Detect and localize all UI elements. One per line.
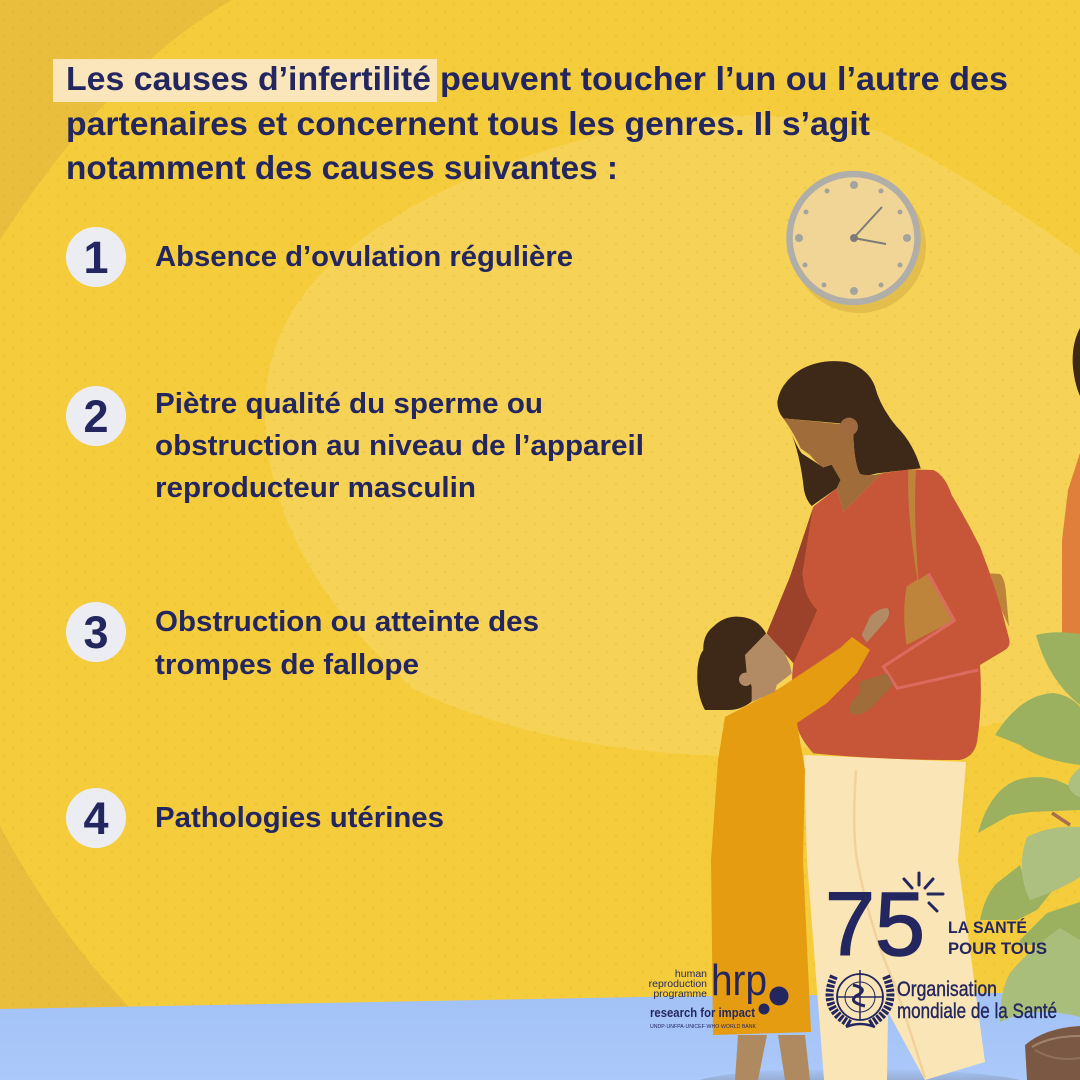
woman face and neck	[783, 418, 882, 512]
slogan: LA SANTÉ	[948, 918, 1027, 937]
child dress	[711, 637, 870, 1035]
stem	[1052, 813, 1070, 825]
item 4 text: Pathologies utérines	[155, 802, 444, 834]
slogan: POUR TOUS	[948, 939, 1047, 958]
dark leaf right	[1020, 902, 1080, 945]
list item 1	[66, 227, 573, 287]
logo: HRP research for impact	[649, 956, 788, 1030]
woman hand	[850, 673, 893, 715]
child ear	[739, 673, 752, 686]
number badge 1	[66, 227, 126, 287]
item 2 text	[155, 388, 644, 504]
number badge 2	[66, 386, 126, 446]
woman trousers	[804, 755, 985, 1080]
WHO name: Organisation	[897, 978, 997, 1001]
HRP partners: UNDP·UNFPA·UNICEF·WHO·WORLD BANK	[650, 1024, 757, 1030]
title line 2: partenaires et concernent tous les genres. Il s’agit	[66, 105, 870, 142]
icon: wall clock	[790, 174, 926, 313]
item 3 text: Obstruction ou atteinte des	[155, 606, 539, 638]
title line 1 rest: peuvent toucher l’un ou l’autre des	[440, 60, 1008, 97]
WHO name	[897, 978, 1057, 1023]
item 3 text: trompes de fallope	[155, 649, 419, 681]
leaf 3	[978, 777, 1080, 833]
number badge 4: 4	[83, 793, 109, 844]
leaf 2	[995, 693, 1080, 765]
pot	[1025, 1026, 1080, 1080]
leaf 1	[1036, 632, 1080, 705]
title line 3: notamment des causes suivantes :	[66, 149, 618, 186]
HRP tagline: research for impact	[650, 1006, 756, 1020]
HRP descriptor: human	[675, 968, 707, 980]
item 1 text: Absence d’ovulation régulière	[155, 241, 573, 273]
woman back of bag	[990, 573, 1009, 627]
number badge 3: 3	[83, 607, 109, 658]
title block	[53, 59, 1008, 186]
light leaf upper	[1022, 827, 1080, 900]
slogan	[948, 918, 1047, 958]
list item 2	[66, 386, 644, 504]
logo: World Health Organization	[830, 970, 1057, 1027]
title highlight	[53, 59, 437, 102]
75 numerals: 75	[825, 875, 925, 975]
floor: blue band	[0, 992, 1080, 1080]
HRP wordmark: hrp	[711, 956, 767, 1005]
WHO emblem	[830, 970, 890, 1027]
item 2 text: reproducteur masculin	[155, 472, 476, 504]
figure: child	[697, 608, 889, 1080]
item 2 text: obstruction au niveau de l’appareil	[155, 430, 644, 462]
list item 3	[66, 602, 539, 681]
logo: 75 La santé pour tous	[825, 873, 1047, 975]
title line 1 highlighted: Les causes d’infertilité	[66, 60, 431, 97]
HRP dots	[758, 986, 788, 1014]
child hand	[862, 608, 889, 643]
sun rays	[904, 873, 943, 911]
number badge 4	[66, 788, 126, 848]
HRP descriptor: reproduction	[649, 978, 707, 990]
woman far arm	[767, 507, 817, 665]
woman hair	[777, 361, 921, 475]
item 3 text	[155, 606, 539, 681]
HRP descriptor: programme	[653, 988, 707, 1000]
figure: partner at right edge	[1062, 328, 1080, 642]
child hair	[697, 617, 766, 710]
woman sweater	[792, 469, 1010, 760]
woman bag	[904, 469, 955, 645]
light leaf lower	[1000, 928, 1080, 1022]
dark leaf	[980, 865, 1053, 920]
number badge 2: 2	[83, 391, 109, 442]
child face	[743, 633, 792, 702]
number badge 1: 1	[83, 232, 109, 283]
child legs	[735, 1035, 810, 1080]
small light leaf	[1068, 768, 1080, 797]
number badge 3	[66, 602, 126, 662]
figure: woman	[767, 361, 1010, 1080]
plant with green leaves	[978, 632, 1080, 1022]
HRP descriptor	[649, 968, 707, 1000]
list item 4	[66, 788, 444, 848]
woman sleeve edge	[883, 573, 978, 688]
item 2 text: Piètre qualité du sperme ou	[155, 388, 543, 420]
